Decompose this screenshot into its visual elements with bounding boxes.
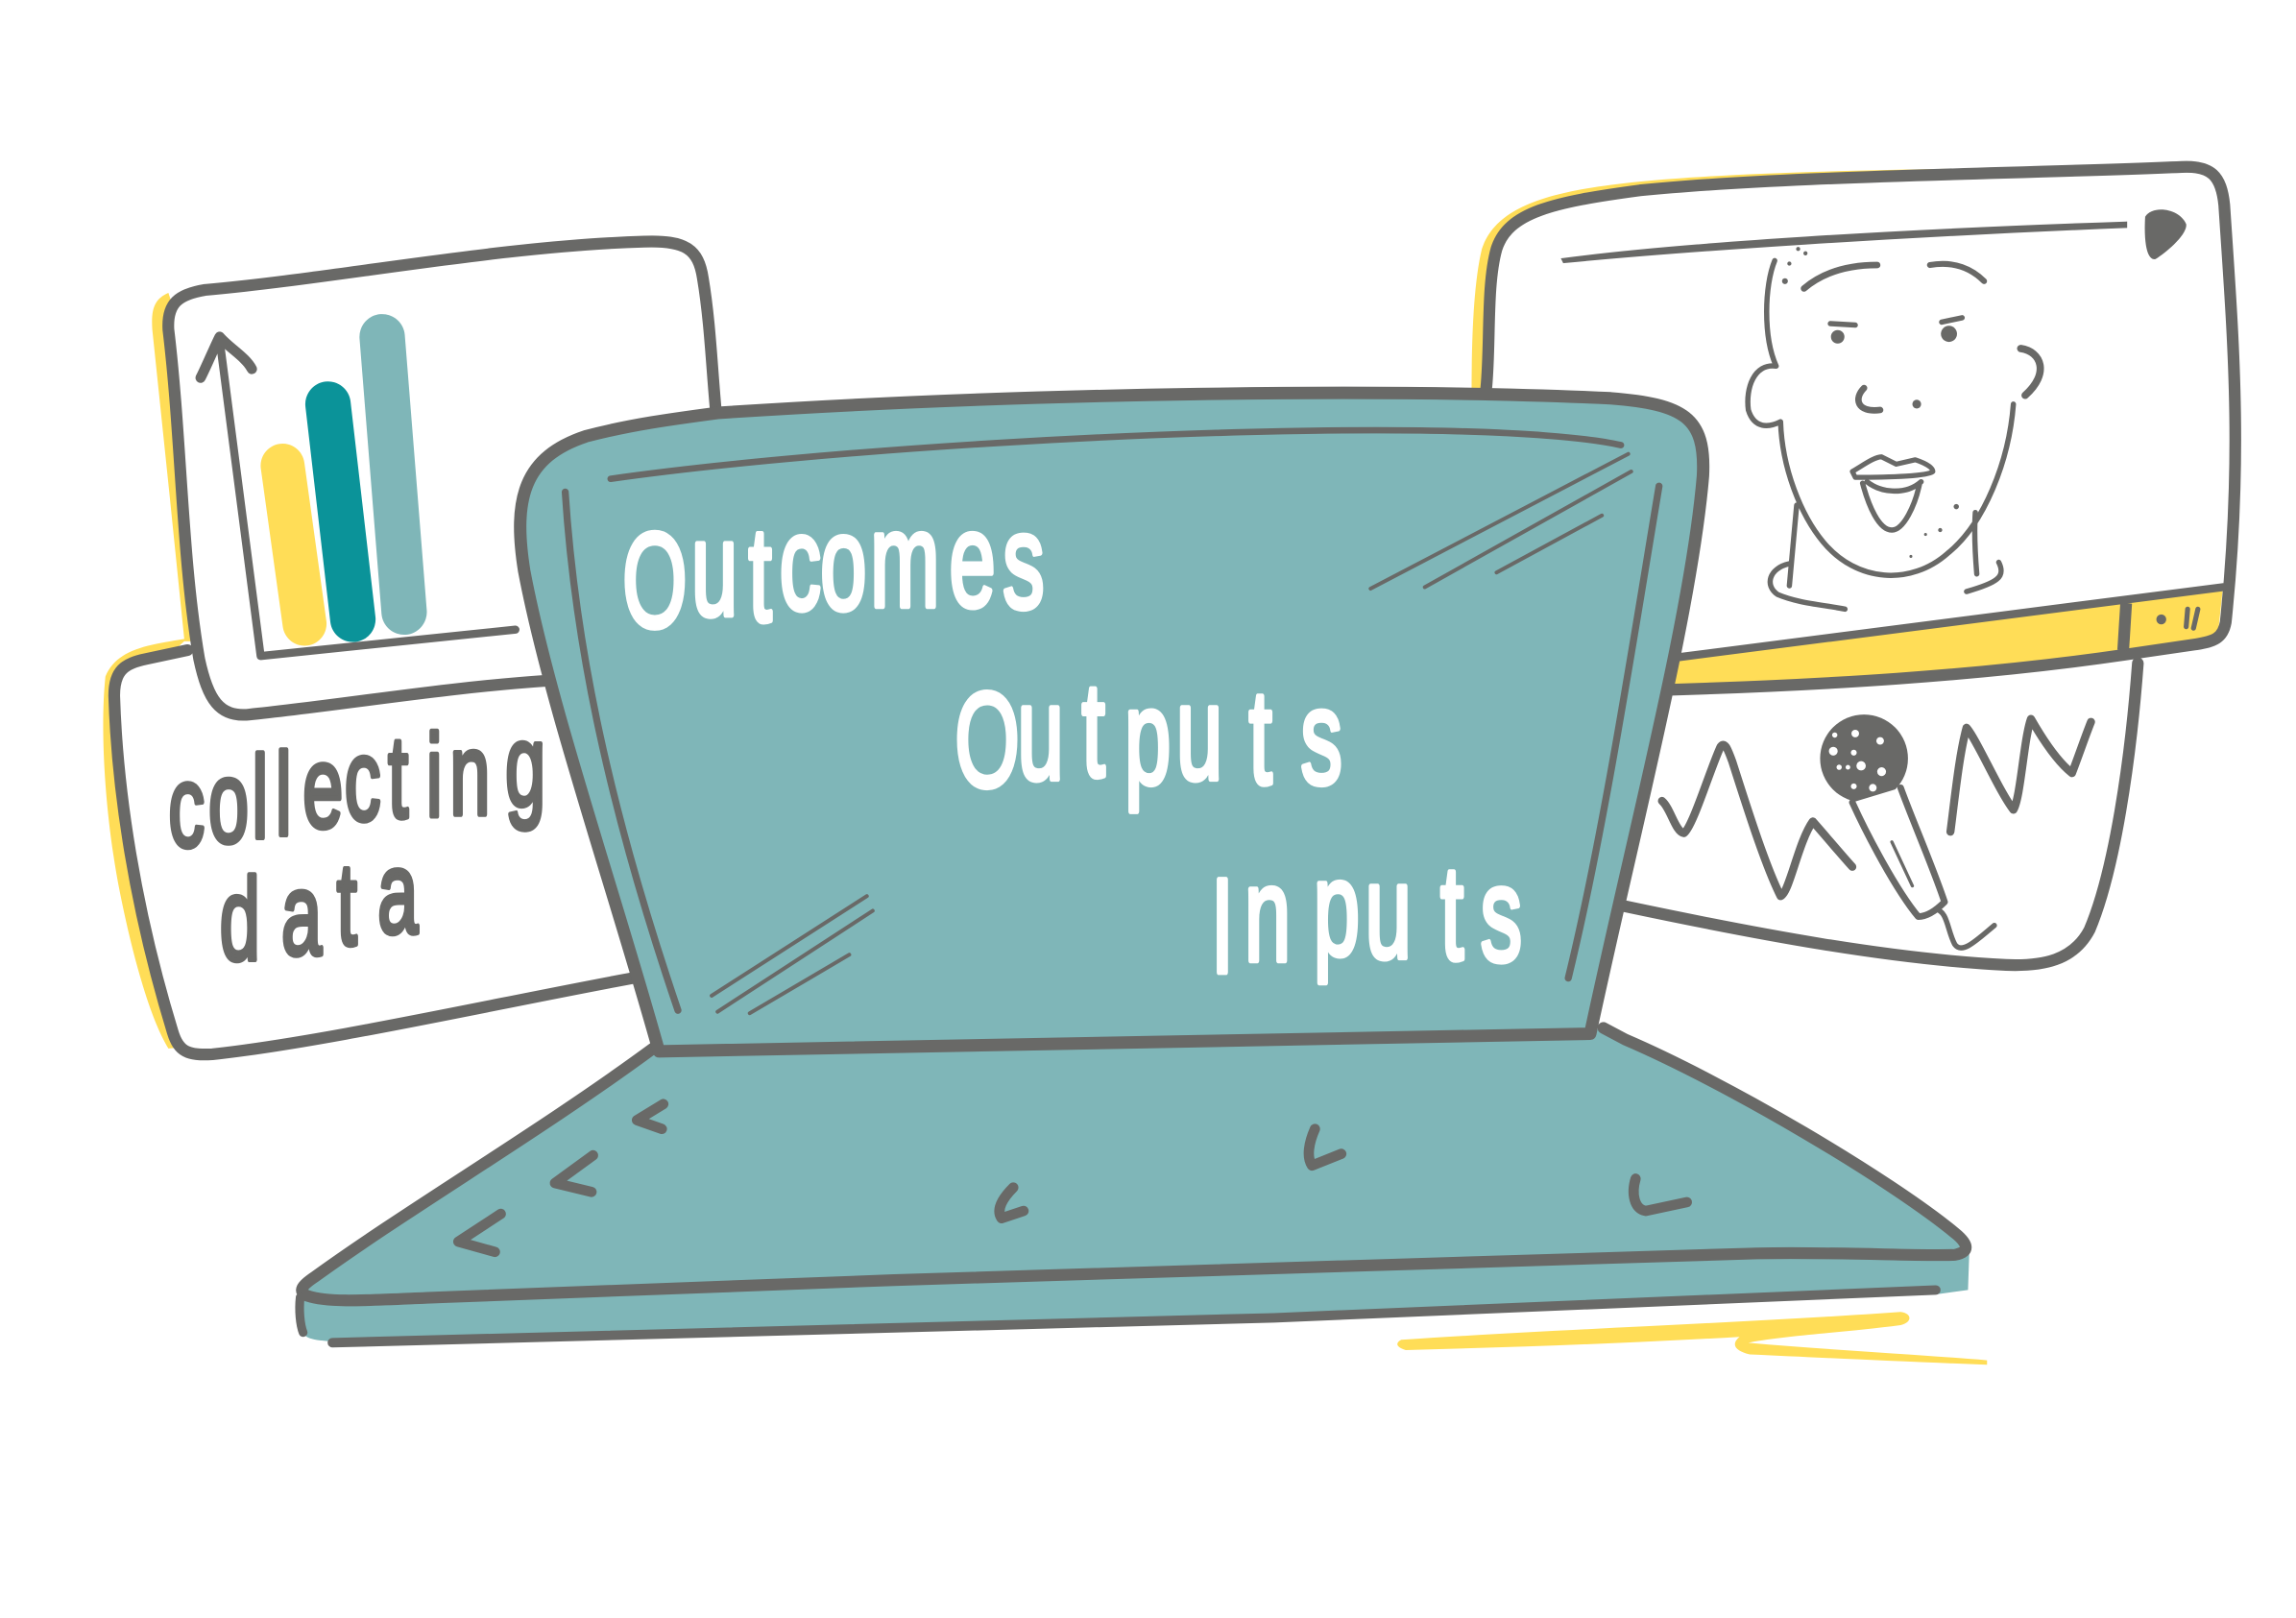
yellow toolbar strip: [1669, 589, 2223, 686]
laptop: base and keyboard: [300, 1027, 1970, 1342]
bar: dark teal: [328, 404, 352, 619]
bar: yellow: [282, 466, 304, 624]
screen glare top right: [1370, 454, 1631, 589]
text: Outputs: Outputs: [955, 654, 1342, 815]
text: data: data: [220, 827, 419, 984]
icon: microphone: [1820, 714, 1994, 948]
text: Outcomes: Outcomes: [622, 484, 1045, 656]
icon: play button: [2145, 209, 2187, 259]
panel: video call window: [1471, 167, 2236, 691]
waveform left: [1662, 745, 1852, 896]
screen glare bottom left: [712, 896, 873, 1013]
text: collecting: collecting: [168, 699, 545, 872]
laptop: screen: [520, 393, 1704, 1051]
laptop: front edge line: [332, 1290, 1936, 1342]
waveform right: [1950, 719, 2091, 832]
illustration: face: [1748, 247, 2041, 609]
title bar line: [1562, 223, 2126, 262]
decoration: yellow scribble under laptop: [1397, 1312, 1987, 1364]
panel: collecting data card: [103, 639, 633, 1054]
screen inner edges: [566, 430, 1659, 1010]
panel: microphone card: [1623, 659, 2138, 965]
text: Inputs: Inputs: [1211, 833, 1522, 1002]
keyboard marks: [458, 1104, 1687, 1252]
chart axes with arrow: [201, 337, 516, 656]
panel: bar chart card: [152, 241, 717, 714]
bar: light teal: [382, 337, 404, 612]
